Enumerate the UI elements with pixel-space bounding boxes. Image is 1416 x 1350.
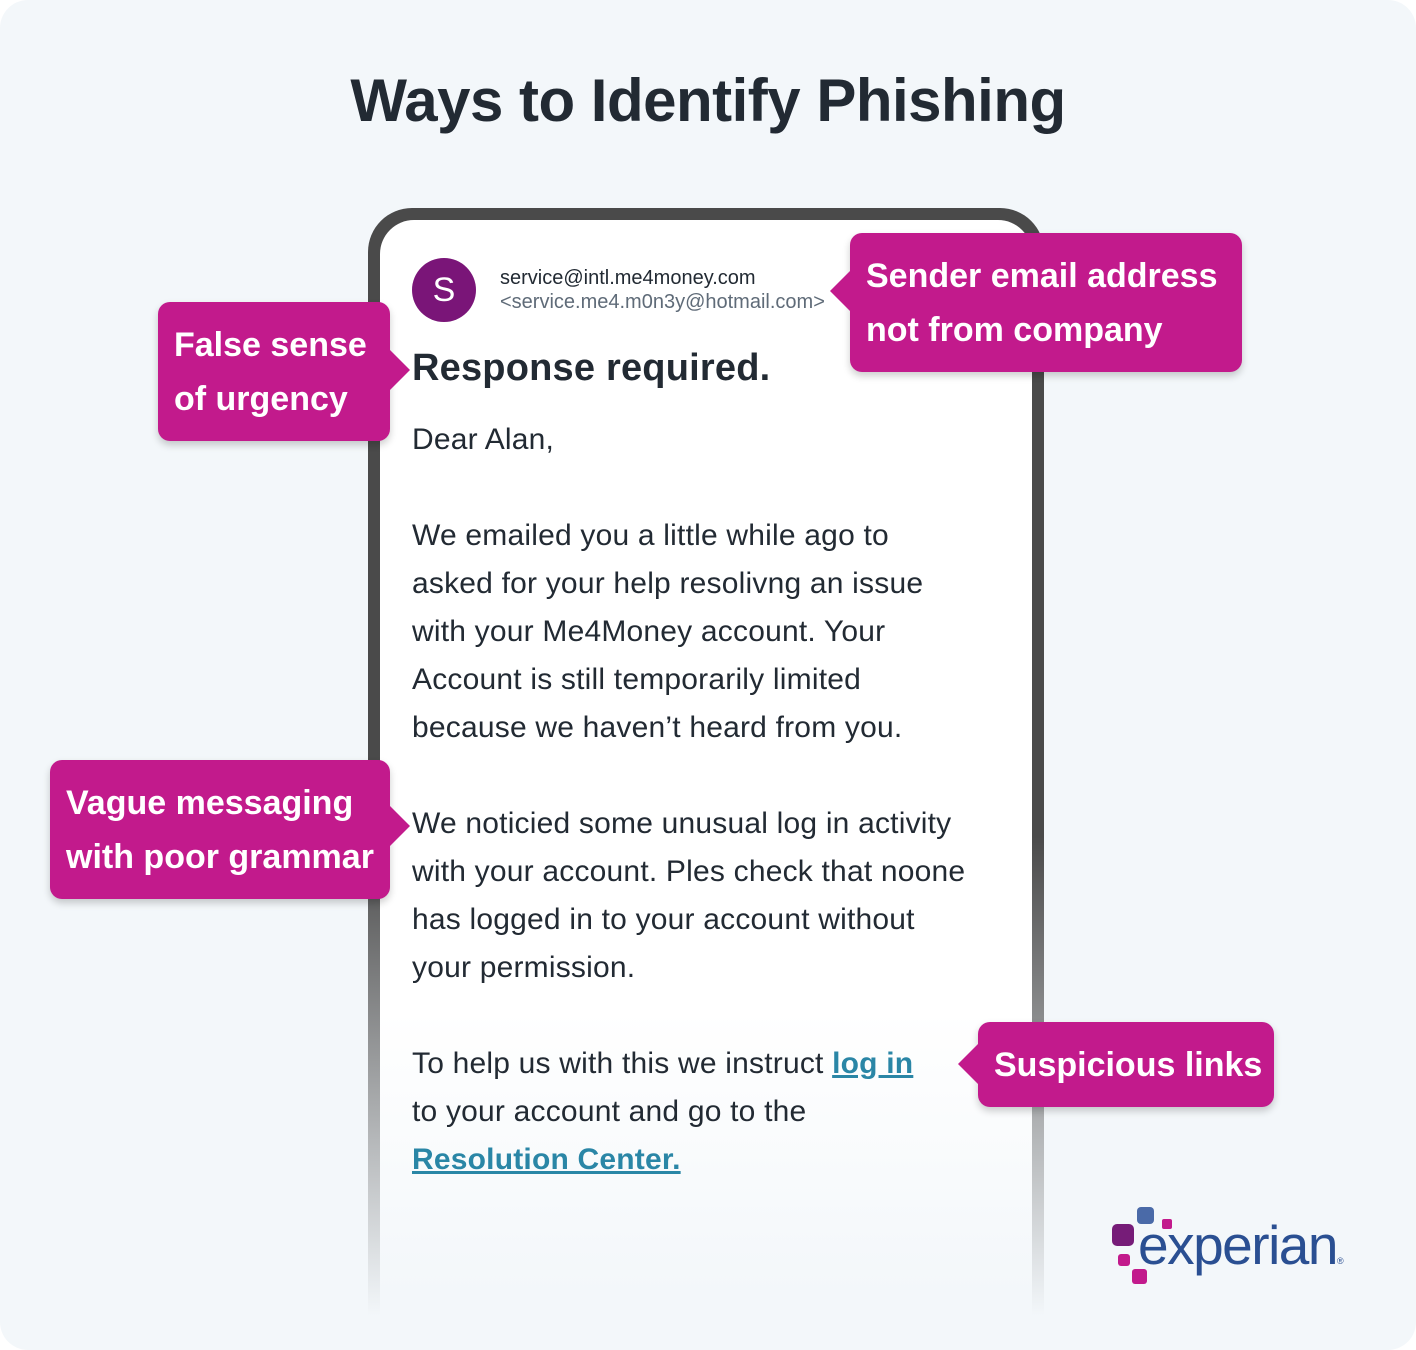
paragraph 1 — [412, 519, 923, 744]
callout: false sense of urgency: False sense — [174, 326, 367, 364]
paragraph 3 with links: Resolution Center. — [412, 1143, 681, 1176]
callout: vague messaging: Vague messaging — [66, 784, 353, 822]
subject: Response required. — [412, 347, 770, 389]
callout: suspicious links: Suspicious links — [994, 1046, 1262, 1084]
paragraph 2 — [412, 807, 965, 984]
greeting: Dear Alan, — [412, 423, 554, 456]
paragraph 1: Account is still temporarily limited — [412, 663, 861, 696]
callout: sender email — [850, 233, 1242, 372]
callout: sender email: Sender email address — [866, 257, 1218, 295]
paragraph 2: your permission. — [412, 951, 635, 984]
sender address: service@intl.me4money.com — [500, 267, 756, 289]
paragraph 3 with links: to your account and go to the — [412, 1095, 806, 1128]
callout: suspicious links — [978, 1022, 1274, 1107]
paragraph 1: because we haven’t heard from you. — [412, 711, 902, 744]
title: Ways to Identify Phishing — [350, 67, 1066, 134]
sender address — [500, 267, 825, 313]
callout: sender email: not from company — [866, 311, 1163, 349]
paragraph 3 with links: To help us with this we instruct log in — [412, 1047, 913, 1080]
callout: false sense of urgency — [158, 302, 390, 441]
phone mockup — [368, 208, 1044, 1350]
paragraph 2: We noticied some unusual log in activity — [412, 807, 951, 840]
icon: sender avatar: S — [433, 271, 455, 309]
logo: experian: experian® — [1138, 1214, 1342, 1276]
callout: vague messaging: with poor grammar — [66, 838, 374, 876]
callout: vague messaging — [50, 760, 390, 899]
icon: sender avatar — [412, 258, 476, 322]
callout: false sense of urgency: of urgency — [174, 380, 348, 418]
paragraph 1: We emailed you a little while ago to — [412, 519, 889, 552]
paragraph 2: has logged in to your account without — [412, 903, 915, 936]
paragraph 1: asked for your help resolivng an issue — [412, 567, 923, 600]
paragraph 3 with links — [412, 1047, 914, 1176]
sender address: <service.me4.m0n3y@hotmail.com> — [500, 291, 825, 313]
paragraph 1: with your Me4Money account. Your — [412, 615, 885, 648]
paragraph 2: with your account. Ples check that noone — [412, 855, 965, 888]
